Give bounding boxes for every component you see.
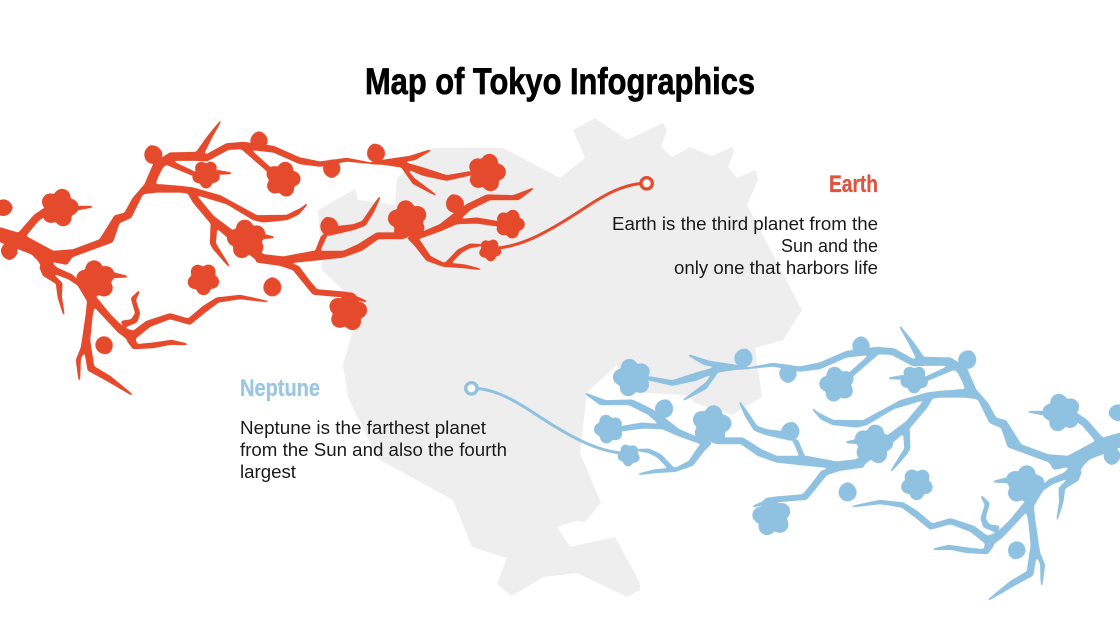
Neptune description: from the Sun and also the fourth [240,440,507,460]
Neptune description: largest [240,462,296,482]
blue branches [585,326,1120,600]
Earth description [612,214,878,278]
red connector line and ring marker [498,178,652,248]
red blossoms [37,149,528,332]
red branches [0,121,533,395]
blue blossoms [590,354,1084,537]
red buds [0,131,467,358]
blue connector line and ring marker [466,383,620,453]
text block: Earth [612,171,878,278]
Neptune description [240,418,507,482]
title: Map of Tokyo Infographics [365,61,755,102]
Neptune heading: Neptune [240,375,320,402]
Earth heading: Earth [829,171,878,198]
Earth description: only one that harbors life [674,258,878,278]
blue buds [652,336,1120,563]
blue cherry blossom branch [466,326,1120,600]
red cherry blossom branch [0,121,652,395]
background map of Tokyo [318,118,802,597]
text block: Neptune [240,375,507,482]
Earth description: Sun and the [781,236,878,256]
Neptune description: Neptune is the farthest planet [240,418,486,438]
Earth description: Earth is the third planet from the [612,214,878,234]
